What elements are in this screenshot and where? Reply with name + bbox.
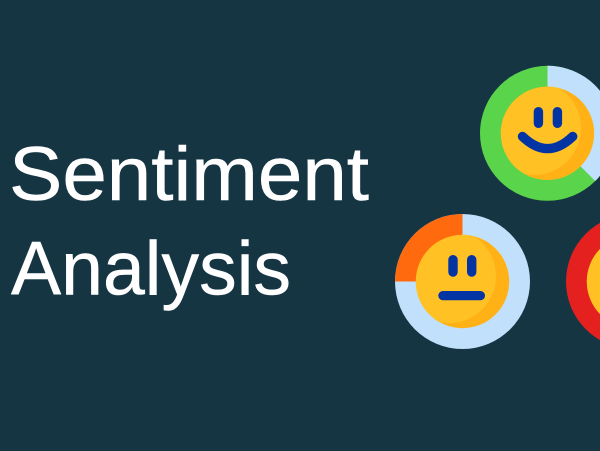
icon: happy face gauge [480, 66, 600, 201]
title [9, 132, 369, 312]
icon: neutral face gauge [395, 214, 530, 349]
title: Sentiment [9, 132, 369, 217]
title: Analysis [11, 226, 291, 312]
icon: negative face gauge [566, 222, 600, 340]
